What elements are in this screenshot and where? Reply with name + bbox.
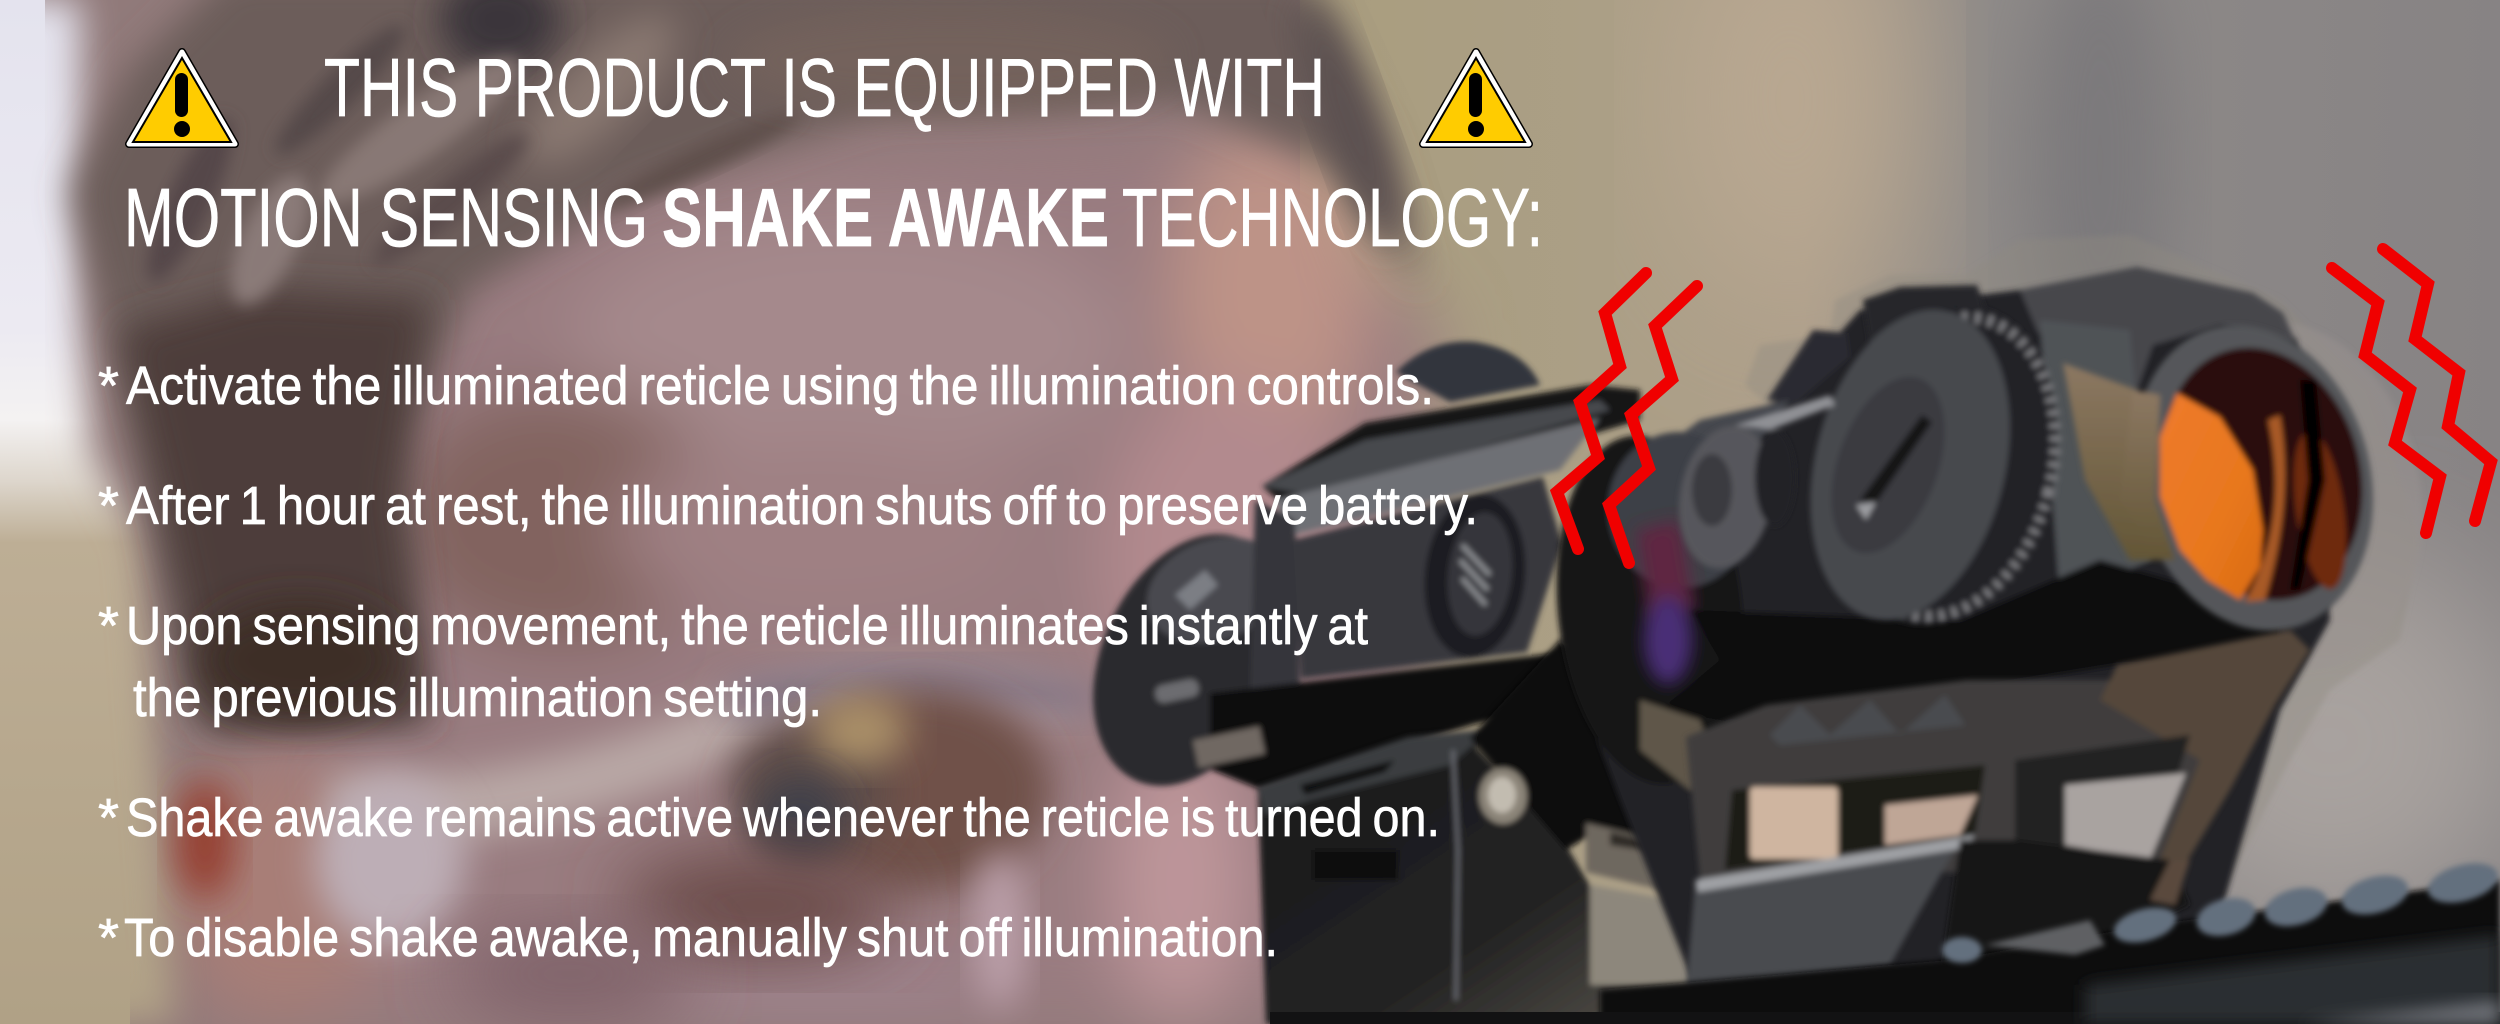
objective lens with orange glass — [2063, 298, 2406, 658]
eye and glasses — [175, 665, 1100, 1024]
title line 2: TECHNOLOGY: — [1122, 171, 1543, 264]
bullet 2: * — [98, 476, 119, 536]
bullet 4: * — [98, 788, 119, 848]
title line 2: MOTION SENSING — [124, 171, 648, 264]
bullet 3: Upon sensing movement, the reticle illuminates instantly at — [126, 596, 1368, 656]
hair — [70, 0, 1425, 730]
icon: left warning triangle — [129, 52, 235, 144]
bullet 1: Activate the illuminated reticle using the illumination controls. — [126, 356, 1434, 416]
bullet 5: To disable shake awake, manually shut off illumination. — [124, 908, 1278, 968]
shake motion marks: left pair — [1557, 273, 1697, 563]
picatinny rail — [1270, 856, 2500, 1024]
lower mount with windows — [1686, 630, 2310, 990]
icon: right warning triangle — [1423, 52, 1529, 144]
title line 2 — [124, 171, 1543, 264]
turret dials — [1668, 281, 2090, 649]
shake motion marks: right pair — [2332, 249, 2491, 533]
bullet 2: After 1 hour at rest, the illumination shuts off to preserve battery. — [126, 476, 1478, 536]
backdrop: right side — [1300, 0, 2500, 1024]
title line 1: THIS PRODUCT IS EQUIPPED WITH — [324, 41, 1325, 134]
mount clamp — [1258, 640, 1730, 1024]
left light backdrop — [0, 0, 186, 1024]
bullet 3 — [98, 596, 1368, 728]
bullet 3: * — [98, 596, 119, 656]
title line 2: SHAKE AWAKE — [662, 171, 1109, 264]
optic main housing — [1540, 267, 2330, 1000]
bullet 1: * — [98, 356, 119, 416]
bullet 3: the previous illumination setting. — [133, 668, 822, 728]
red dot sight: motion-blurred scope and mount — [1056, 235, 2500, 1024]
ghost motion silhouette — [1745, 235, 2454, 900]
rear sight upper body — [1056, 342, 1640, 816]
bullet 5: * — [98, 908, 119, 968]
bullet 4: Shake awake remains active whenever the reticle is turned on. — [126, 788, 1440, 848]
face — [170, 120, 1440, 1024]
